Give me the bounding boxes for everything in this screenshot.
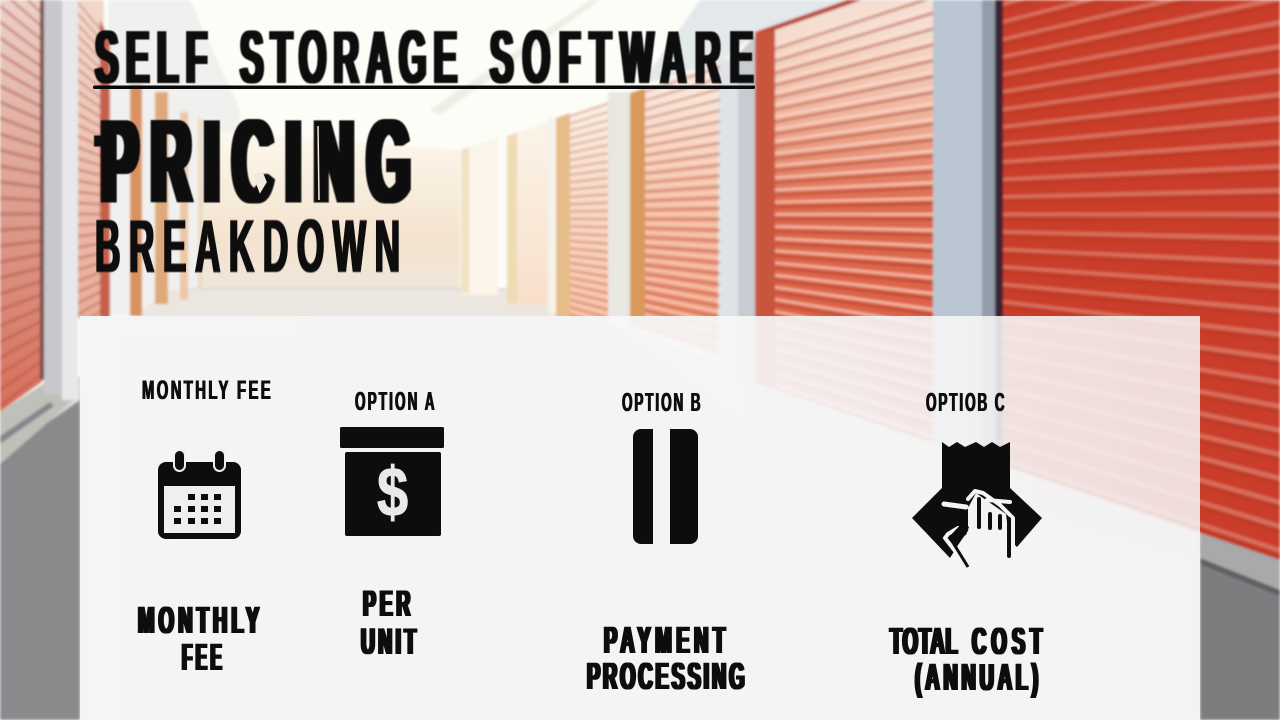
heading: self storage software bbox=[93, 16, 755, 100]
caption: total cost annual bbox=[890, 621, 1043, 699]
icon: receipt in hand bbox=[912, 442, 1042, 573]
column: option a bbox=[340, 387, 444, 663]
caption: monthly fee: MONTHLY bbox=[138, 600, 259, 642]
caption: total cost annual: COST bbox=[972, 621, 1043, 663]
column: option b bbox=[587, 388, 745, 698]
label: option a: OPTION A bbox=[355, 387, 435, 416]
caption: payment processing bbox=[587, 620, 745, 698]
label: option c: OPTIOB C bbox=[926, 388, 1005, 417]
big door stripe tint bbox=[1003, 0, 1280, 560]
icon: dollar box: $ bbox=[377, 454, 408, 531]
icon: payment card bbox=[633, 427, 698, 546]
left wall far doors bbox=[130, 85, 142, 316]
caption: monthly fee bbox=[138, 600, 259, 679]
icon: calendar bbox=[158, 450, 241, 539]
column: monthly fee bbox=[138, 374, 271, 679]
caption: per unit: UNIT bbox=[361, 621, 416, 663]
label: monthly fee: MONTHLY FEE bbox=[142, 374, 271, 405]
column: option c bbox=[890, 388, 1043, 699]
caption: per unit: PER bbox=[363, 583, 410, 625]
heading: breakdown: BREAKDOWN bbox=[95, 205, 400, 289]
left doors bbox=[0, 0, 42, 412]
heading: self storage software: SELF bbox=[95, 16, 207, 100]
caption: total cost annual: TOTAL bbox=[890, 621, 958, 663]
caption: payment processing: PAYMENT bbox=[604, 620, 725, 662]
icon: dollar box bbox=[340, 427, 444, 536]
right far doors bbox=[461, 138, 498, 295]
floor bbox=[0, 288, 1280, 720]
caption: total cost annual: (ANNUAL) bbox=[915, 657, 1038, 699]
heading: pricing: PRICING bbox=[101, 96, 410, 228]
heading: self storage software: SOFTWARE bbox=[490, 16, 753, 100]
heading: self storage software: STORAGE bbox=[240, 16, 457, 100]
caption: monthly fee: FEE bbox=[182, 636, 222, 679]
right pillars bbox=[718, 55, 738, 370]
right doors bbox=[755, 0, 933, 443]
caption: payment processing: PROCESSING bbox=[587, 656, 745, 698]
label: option b: OPTION B bbox=[622, 388, 701, 417]
caption: per unit bbox=[361, 583, 416, 663]
